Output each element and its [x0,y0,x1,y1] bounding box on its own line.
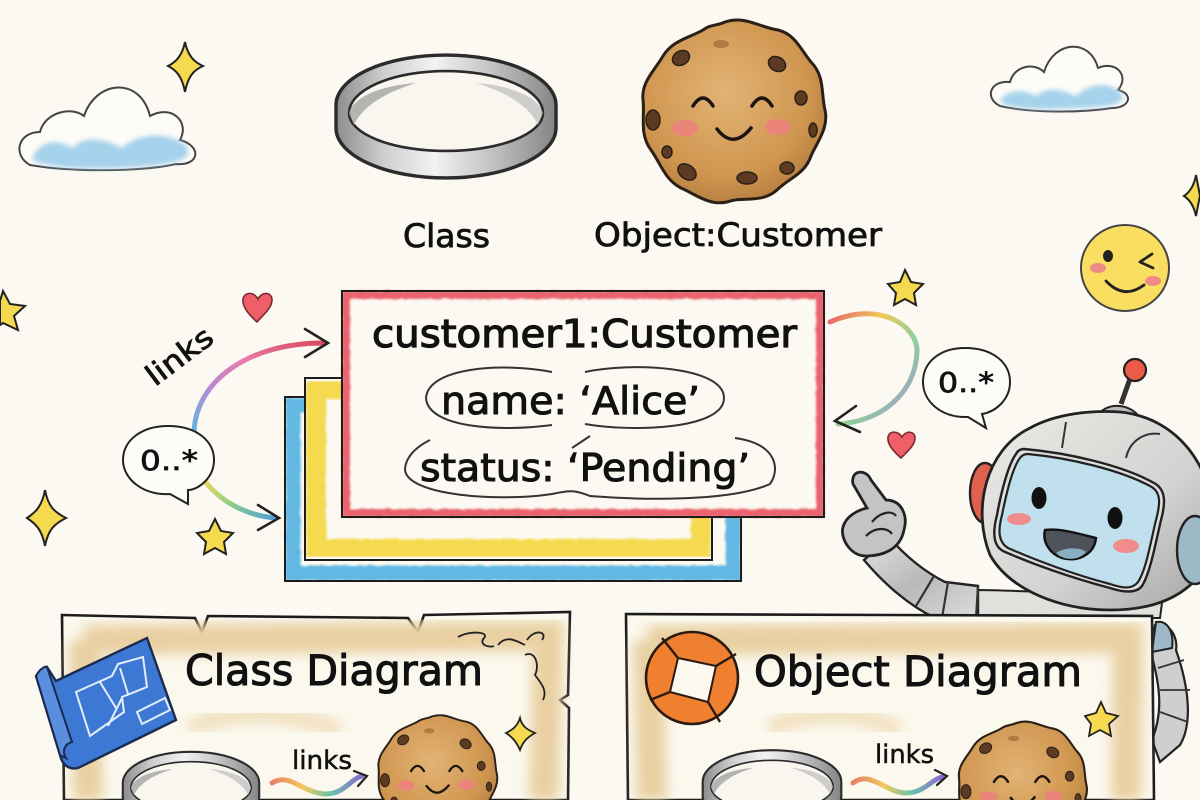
arrow: right rainbow [830,314,917,432]
arrow: rainbow link [853,770,947,793]
heading: Object Diagram: Object Diagram [754,647,1082,696]
card heading: customer1:Customer [372,312,797,356]
map scribble [458,632,545,700]
small ring [123,752,259,800]
bubble: right multiplicity [923,348,1010,428]
icon: star [1085,702,1118,736]
icon: star lower left [197,519,233,554]
arrow: left lower rainbow [204,480,279,530]
icon: star left edge [0,291,25,330]
robot mouth [1044,530,1096,559]
robot mascot [842,359,1200,762]
robot right ear [1177,516,1200,584]
robot cheeks [1007,513,1031,525]
arrow: left upper rainbow [194,329,328,432]
attribute: name [426,367,724,428]
robot helmet [982,412,1200,610]
icon: sparkle left [27,490,66,546]
stacked card: blue [285,397,741,581]
icon: sparkle top [168,42,203,92]
label: links: links [292,746,352,776]
small cookie [959,722,1087,800]
icon: orange shutter [646,632,738,724]
stacked card: yellow [305,378,712,560]
robot right arm [1150,622,1190,762]
small ring [703,750,841,800]
ring: class [336,55,556,178]
robot torso [979,589,1163,619]
attribute: status: status: ‘Pending’ [420,446,750,490]
robot hand [842,472,905,556]
bubble: left multiplicity: 0..* [140,444,198,477]
main object card [342,291,824,517]
icon: star upper right [888,270,923,305]
icon: blueprint [36,638,176,768]
label: links rotated: links [139,320,220,393]
panel: class diagram [36,612,570,800]
attribute: status [405,436,775,499]
icon: heart right [888,432,915,458]
attribute: name: name: ‘Alice’ [441,379,700,423]
icon: heart top [243,293,272,322]
robot eyes [1032,487,1046,509]
bubble: right multiplicity: 0..* [938,366,994,399]
small cookie [378,715,497,800]
panel: object diagram [626,614,1154,800]
robot left ear [968,462,992,524]
icon: sparkle right edge [1184,175,1200,216]
label: links: links [875,740,934,770]
label: Object:Customer: Object:Customer [594,216,883,254]
robot antenna [1097,359,1146,418]
robot pointing arm [842,472,978,618]
bubble: left multiplicity [123,426,214,504]
cookie: object [643,20,826,203]
robot face screen [994,449,1164,592]
arrow: rainbow link [272,771,367,794]
icon: wink emoji [1081,225,1169,311]
icon: cloud left [19,87,195,170]
heading: Class Diagram: Class Diagram [185,646,483,695]
icon: cloud right [991,47,1128,112]
icon: sparkle [506,718,535,750]
label: Class: Class [403,217,490,255]
